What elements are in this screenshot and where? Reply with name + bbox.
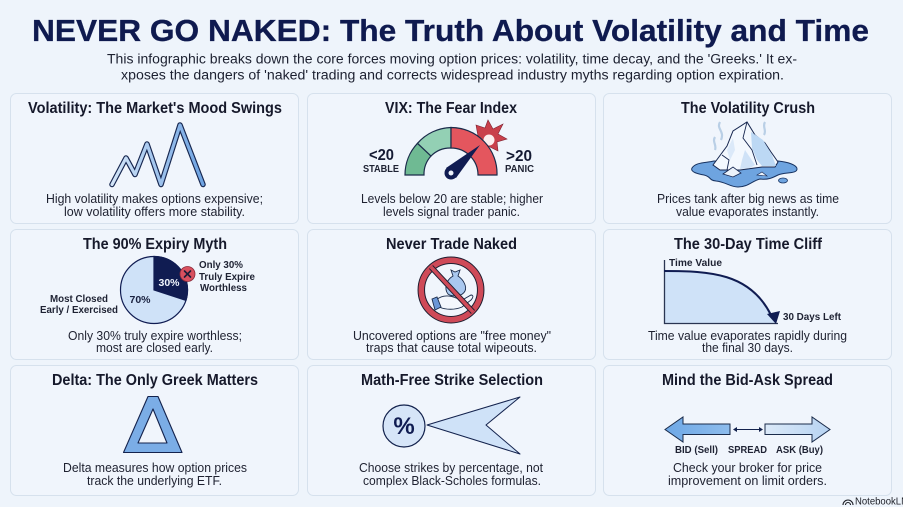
description: most are closed early. xyxy=(96,341,213,355)
description: Prices tank after big news as time xyxy=(657,192,839,206)
panel: 30-day time cliff xyxy=(604,230,892,360)
heading: The Volatility Crush xyxy=(681,100,815,117)
description: Delta measures how option prices xyxy=(63,461,247,475)
panel: 90% expiry myth xyxy=(10,230,298,360)
icon: open hand xyxy=(432,295,473,310)
intro text: xposes the dangers of 'naked' trading and corrects widespread industry myths regarding option expiration. xyxy=(121,68,784,82)
label: most closed: Early / Exercised xyxy=(40,305,118,316)
label: only 30%: Truly Expire xyxy=(199,272,255,283)
icon: red x badge xyxy=(180,266,195,282)
description xyxy=(63,461,247,488)
icon: delta triangle xyxy=(124,396,182,452)
icon: fear gauge xyxy=(405,127,497,175)
heading: The 90% Expiry Myth xyxy=(83,236,227,253)
icon: money bag xyxy=(446,270,466,296)
chart: pie 30 / 70: 30% xyxy=(158,277,180,289)
intro text: This infographic breaks down the core forces moving option prices: volatility, time decay, and the 'Greeks.' It ex- xyxy=(107,52,797,66)
icon: melting iceberg xyxy=(692,122,797,187)
chart: pie 30 / 70 xyxy=(120,256,188,324)
description xyxy=(361,192,543,219)
panel: volatility crush xyxy=(604,94,892,224)
description: Choose strikes by percentage, not xyxy=(359,461,543,475)
labels: SPREAD xyxy=(728,445,767,456)
labels: ASK (Buy) xyxy=(776,445,823,456)
description xyxy=(68,329,242,355)
label: panic: >20 xyxy=(506,148,532,165)
icon: gauge needle xyxy=(444,145,480,180)
icon: percent circle xyxy=(383,405,425,447)
description: Levels below 20 are stable; higher xyxy=(361,192,543,206)
icon: percent circle: % xyxy=(393,413,415,440)
labels xyxy=(675,445,823,456)
icon: ask arrow xyxy=(765,417,830,442)
description xyxy=(359,461,543,488)
description: value evaporates instantly. xyxy=(676,205,819,219)
panel: volatility mood swings xyxy=(10,94,298,224)
heading: Volatility: The Market's Mood Swings xyxy=(28,100,282,117)
label: time value: Time Value xyxy=(669,258,722,269)
icon: zigzag volatility line xyxy=(112,125,203,184)
description: High volatility makes options expensive; xyxy=(46,192,263,206)
label: stable: <20 xyxy=(369,147,394,164)
label: panic: PANIC xyxy=(505,164,534,175)
description xyxy=(353,329,551,355)
label: stable xyxy=(363,147,399,175)
heading: Delta: The Only Greek Matters xyxy=(52,372,258,389)
panel: strike selection xyxy=(308,366,596,496)
description: Time value evaporates rapidly during xyxy=(648,329,847,343)
icon: prohibition sign xyxy=(421,260,481,320)
chart: pie 30 / 70: 70% xyxy=(129,294,151,306)
heading: The 30-Day Time Cliff xyxy=(674,236,823,253)
chart: time value decay xyxy=(664,260,780,324)
panel: never trade naked xyxy=(308,230,596,360)
panel: delta xyxy=(10,366,298,496)
description: Check your broker for price xyxy=(673,461,822,475)
label: stable: STABLE xyxy=(363,164,399,175)
description xyxy=(46,192,263,219)
description: levels signal trader panic. xyxy=(383,205,520,219)
description: the final 30 days. xyxy=(702,341,793,355)
label: only 30% xyxy=(199,260,255,294)
icon: pointed wedge xyxy=(427,397,520,454)
label: most closed xyxy=(40,294,118,316)
label: only 30%: Worthless xyxy=(200,283,247,294)
title: NEVER GO NAKED: The Truth About Volatility and Time xyxy=(32,13,869,48)
heading: Math-Free Strike Selection xyxy=(361,372,543,389)
description: Uncovered options are "free money" xyxy=(353,329,551,343)
heading: Mind the Bid-Ask Spread xyxy=(662,372,833,389)
label: only 30%: Only 30% xyxy=(199,260,243,271)
heading: VIX: The Fear Index xyxy=(385,100,517,117)
label: most closed: Most Closed xyxy=(50,294,108,305)
description xyxy=(657,192,839,219)
description: traps that cause total wipeouts. xyxy=(366,341,537,355)
panel: bid-ask spread xyxy=(604,366,892,496)
description xyxy=(648,329,847,355)
icon: spread double arrow xyxy=(733,427,763,432)
description: complex Black-Scholes formulas. xyxy=(363,474,541,488)
description: improvement on limit orders. xyxy=(668,474,827,488)
panel: VIX fear index xyxy=(308,94,596,224)
description: Only 30% truly expire worthless; xyxy=(68,329,242,343)
labels: BID (Sell) xyxy=(675,445,718,456)
label: 30 days left: 30 Days Left xyxy=(783,312,842,323)
intro text xyxy=(107,52,797,82)
heading: Never Trade Naked xyxy=(386,236,517,253)
icon: bid arrow xyxy=(665,417,730,442)
icon: explosion burst xyxy=(476,120,507,151)
label: panic xyxy=(505,148,534,175)
description xyxy=(668,461,827,488)
description: low volatility offers more stability. xyxy=(64,205,245,219)
description: track the underlying ETF. xyxy=(87,474,222,488)
